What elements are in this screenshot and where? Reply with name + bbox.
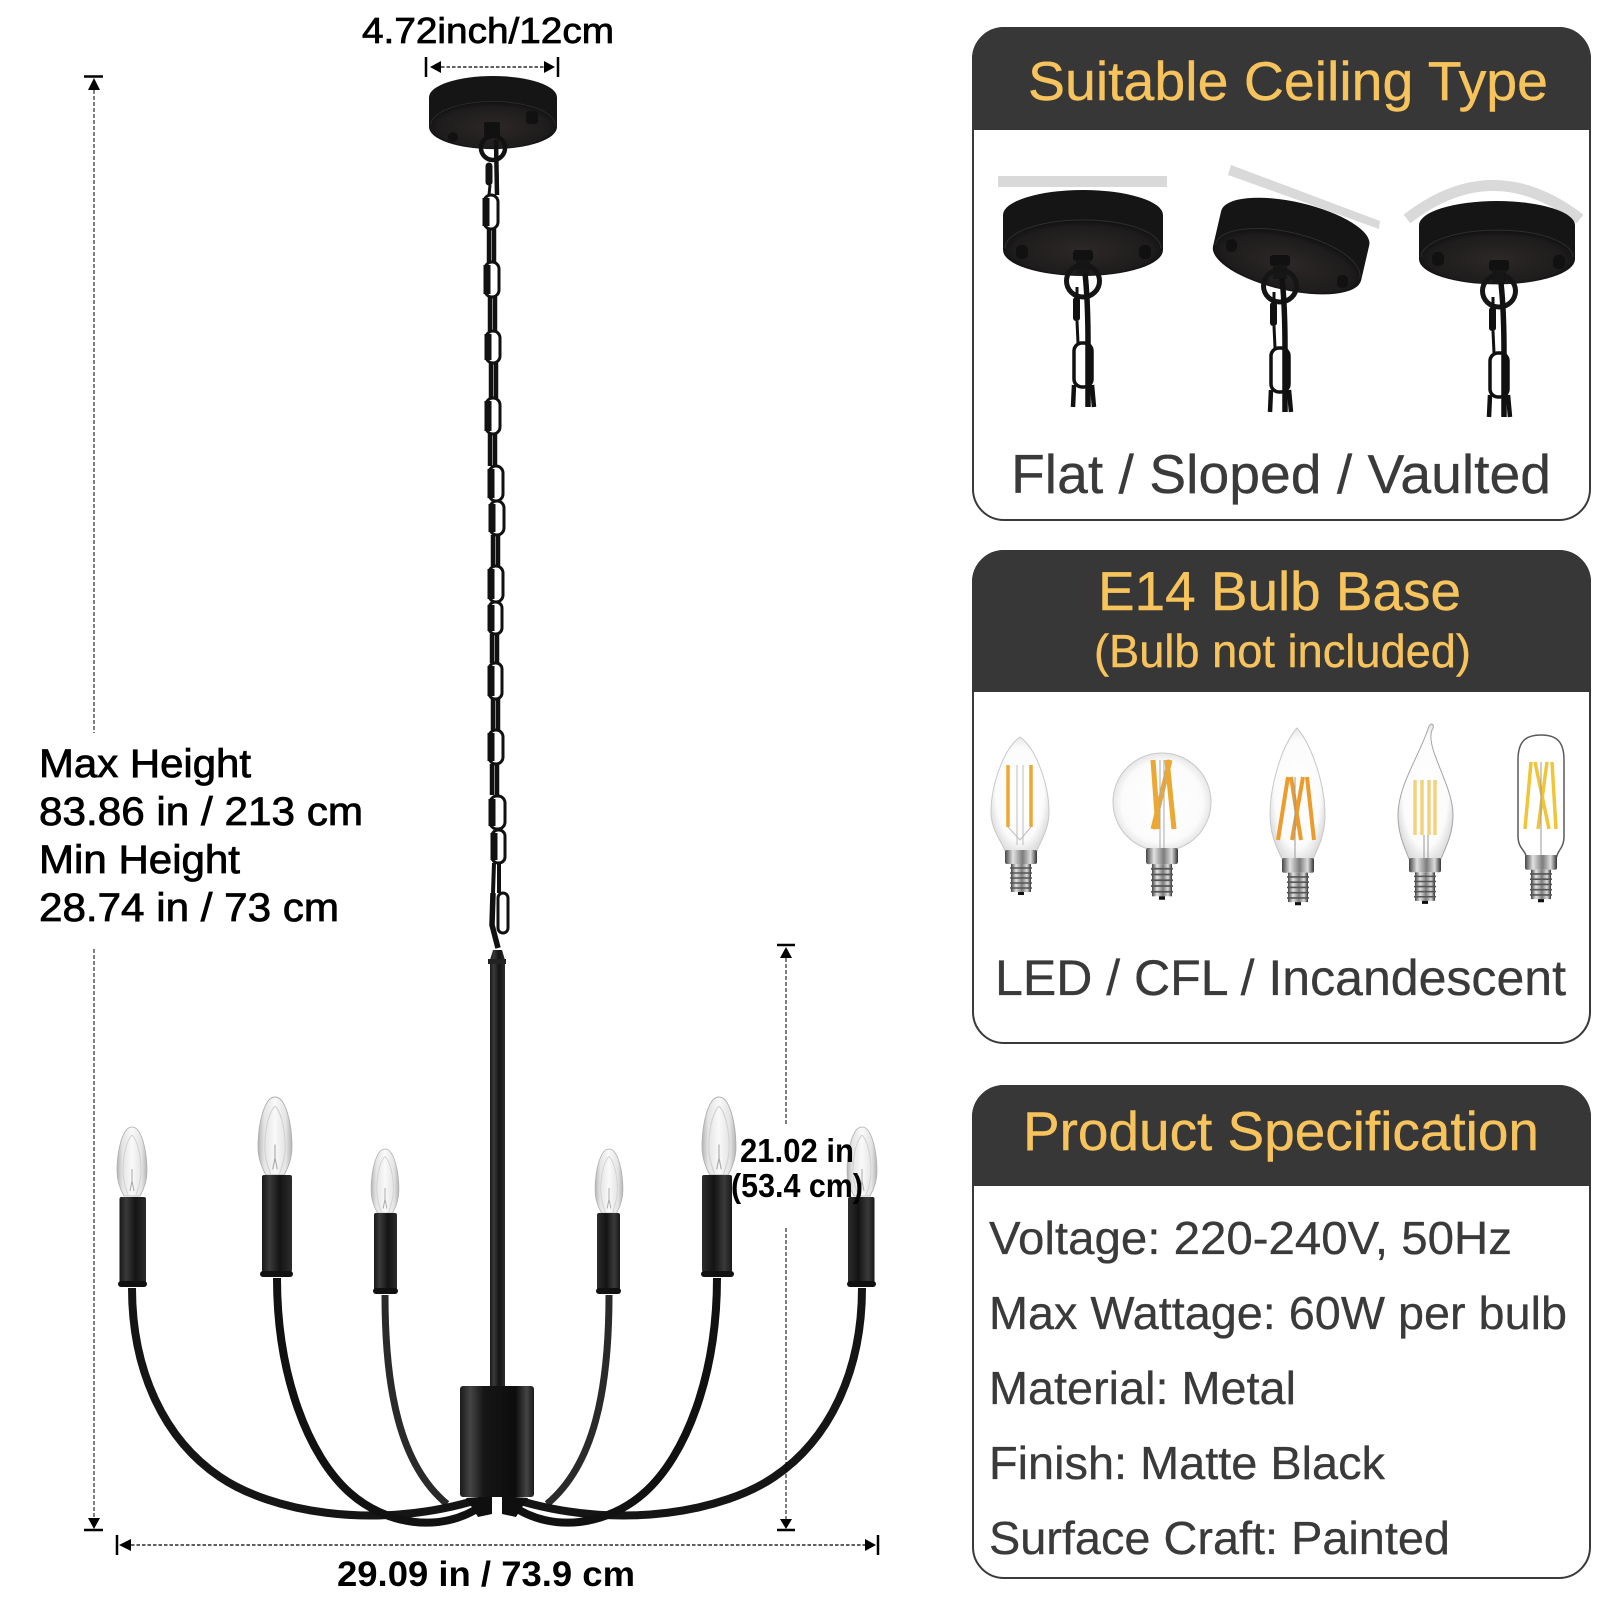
dimension: overall width [117, 1535, 878, 1594]
height label [39, 742, 363, 930]
illustration: vaulted ceiling [1407, 186, 1580, 417]
width label: 4.72inch/12cm [362, 10, 614, 51]
bulb: tubular [1518, 735, 1564, 902]
body height label: (53.4 cm) [731, 1167, 863, 1204]
dimension: body height [731, 945, 863, 1530]
height dashed line and arrows [84, 76, 103, 1530]
overall width arrows [117, 1535, 878, 1555]
illustration: sloped ceiling [1207, 165, 1380, 412]
caption: Flat / Sloped / Vaulted [1011, 443, 1551, 505]
panel: E14 bulb base [972, 550, 1591, 1043]
bulb: torpedo [1270, 728, 1325, 905]
candle arms [132, 1278, 862, 1523]
dimension: total height [39, 76, 363, 1530]
height label: Min Height [39, 838, 240, 882]
dimension: canopy width [362, 10, 614, 77]
panel: suitable ceiling type [972, 27, 1591, 520]
caption: LED / CFL / Incandescent [995, 950, 1566, 1006]
spec: material: Material: Metal [989, 1362, 1296, 1414]
panel: product specification [972, 1085, 1591, 1578]
spec: surface craft: Surface Craft: Painted [989, 1512, 1450, 1564]
width arrows [426, 57, 558, 77]
heading: E14 Bulb Base [1098, 560, 1461, 622]
illustration: flat ceiling [998, 176, 1167, 407]
height label: Max Height [39, 742, 251, 786]
body height dashed line and arrows [777, 945, 795, 1530]
body height label: 21.02 in [740, 1132, 854, 1169]
bulb: globe [1113, 753, 1211, 900]
chandelier product [117, 76, 877, 1523]
center rod [488, 950, 506, 1386]
body height label [731, 1132, 863, 1204]
chain [484, 140, 508, 948]
heading: Product Specification [1023, 1100, 1539, 1162]
height label: 83.86 in / 213 cm [39, 790, 363, 834]
bulb: flame tip [1398, 724, 1453, 904]
candle sleeves and bulbs [117, 1097, 877, 1294]
height label: 28.74 in / 73 cm [39, 886, 339, 930]
heading: Suitable Ceiling Type [1028, 50, 1548, 112]
bulb: candle [991, 737, 1049, 895]
spec: wattage: Max Wattage: 60W per bulb [989, 1287, 1567, 1339]
spec: finish: Finish: Matte Black [989, 1437, 1386, 1489]
ceiling canopy [429, 76, 557, 160]
spec: voltage: Voltage: 220-240V, 50Hz [989, 1212, 1512, 1264]
overall width label: 29.09 in / 73.9 cm [337, 1555, 635, 1594]
subheading: (Bulb not included) [1094, 625, 1471, 677]
center cylinder [460, 1386, 534, 1497]
